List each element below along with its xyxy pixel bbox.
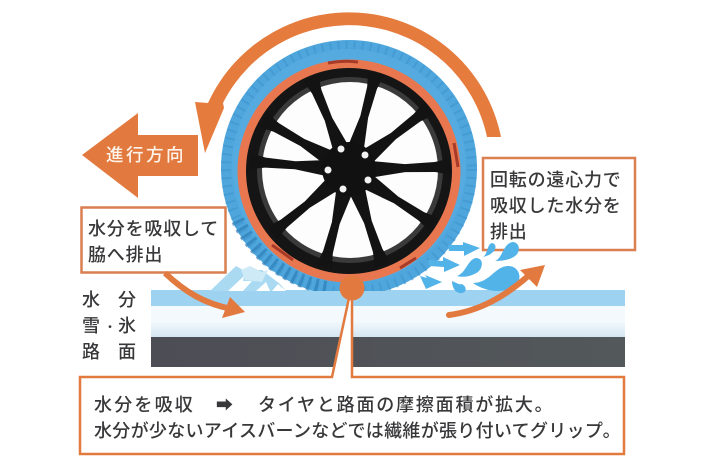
callout: centrifugal: 吸収した水分を: [490, 196, 622, 216]
wheel with sock tire: [221, 40, 477, 296]
road layers: [151, 290, 625, 367]
arrow: water ejected: [449, 265, 545, 315]
layer labels: ・: [104, 320, 116, 334]
callout: absorb: 脇へ排出: [88, 245, 163, 265]
layer labels: 水: [82, 290, 100, 310]
orange sidewall ring: [238, 60, 460, 282]
layer labels: 氷: [118, 316, 136, 336]
callout: contact area: 水分が少ないアイスバーンなどでは繊維が張り付いてグリップ。: [94, 420, 621, 441]
water spray arrows and drops: [420, 242, 519, 293]
callout: centrifugal: 回転の遠心力で: [490, 170, 622, 190]
callout: contact area: [80, 298, 624, 454]
callout: absorb: 水分を吸収して: [88, 219, 219, 239]
callout: contact area: タイヤと路面の摩擦面積が拡大。: [258, 394, 554, 415]
layer labels: 分: [118, 290, 136, 310]
spokes: [257, 78, 443, 262]
rim: [246, 68, 452, 274]
layer labels: 雪: [82, 316, 100, 336]
arrow: water to the side: [165, 273, 245, 318]
layer labels: 面: [118, 342, 136, 362]
lug holes: [324, 146, 372, 192]
splash left: [210, 266, 286, 291]
contact point marker: [340, 276, 364, 300]
hub: [322, 142, 376, 196]
blue textile cover: [221, 40, 477, 296]
ring logos: [272, 61, 458, 268]
layer labels: [82, 290, 136, 362]
callout: absorb: [82, 208, 226, 272]
callout: centrifugal: 排出: [490, 222, 528, 242]
layer labels: 路: [82, 342, 100, 362]
callout: centrifugal: [483, 158, 635, 250]
callout: contact area: 水分を吸収: [94, 395, 195, 415]
arrow: direction of travel: 進行方向: [106, 145, 186, 165]
callout: contact area: ➡: [216, 396, 233, 415]
rotation arc arrow: [195, 12, 501, 153]
drops over callout: [483, 242, 519, 261]
arrow: direction of travel: [82, 113, 198, 198]
